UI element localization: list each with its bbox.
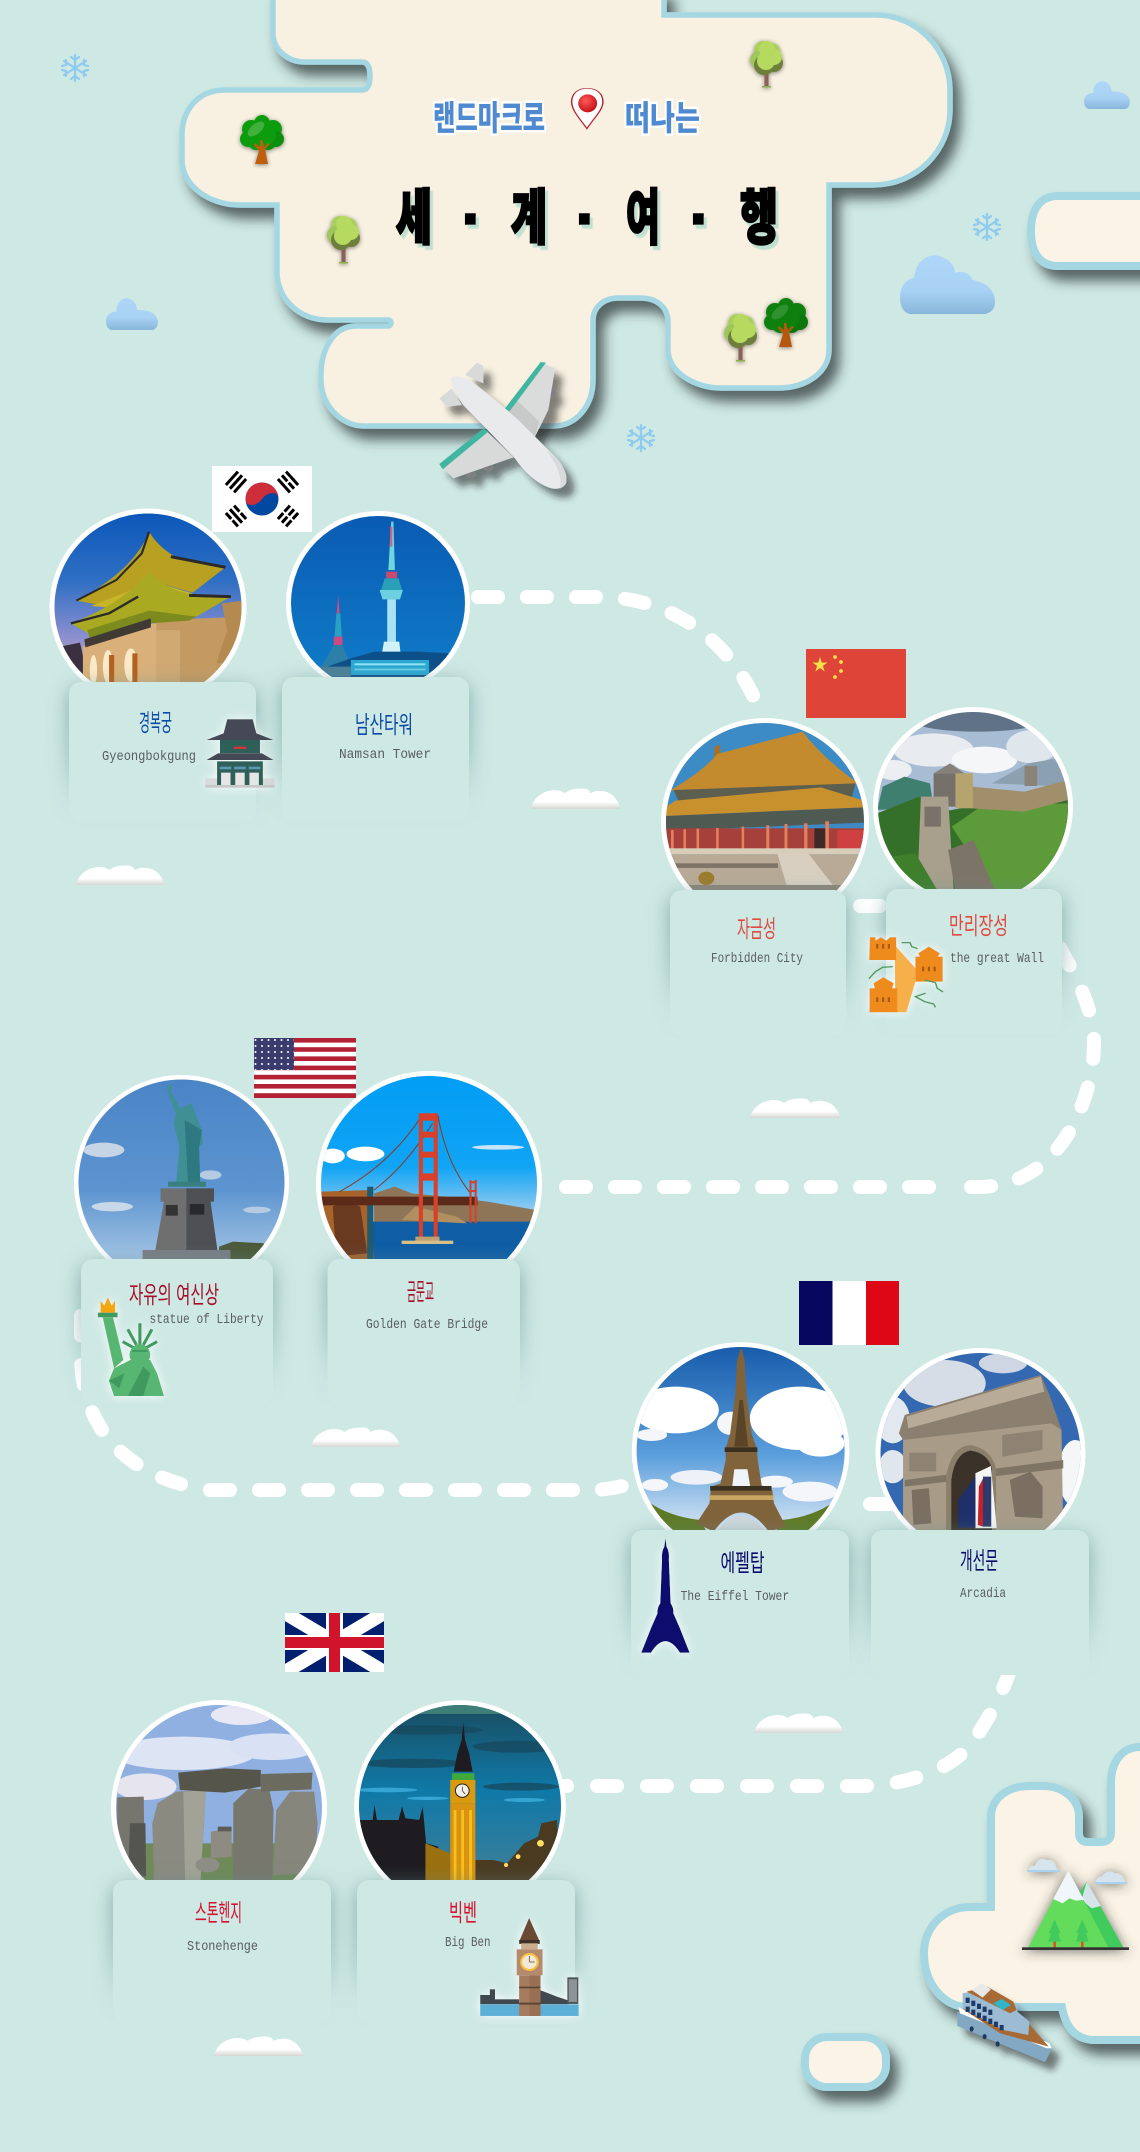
Korean name: 만리장성: 만리장성 — [949, 913, 1008, 940]
Korean name: 자금성: 자금성 — [737, 916, 776, 943]
cloud: white lower left — [311, 1427, 400, 1447]
card: Golden Gate Bridge — [328, 1259, 520, 1404]
tree: light bottom — [724, 314, 757, 362]
photo: Statue of Liberty — [73, 1077, 290, 1263]
route: dashed travel path — [81, 597, 1094, 1786]
subtitle: 랜드마크로: 랜드마크로 — [433, 100, 545, 138]
icon: Statue of Liberty — [98, 1297, 164, 1396]
English name: Namsan Tower: Namsan Tower — [339, 747, 431, 763]
photo: Eiffel Tower — [631, 1340, 851, 1532]
cloud: blue large — [900, 255, 995, 314]
flag: China — [806, 649, 906, 718]
icon: Great Wall — [869, 937, 943, 1012]
English name: statue of Liberty: statue of Liberty — [150, 1312, 264, 1328]
English name: the great Wall: the great Wall — [950, 951, 1044, 967]
tree: dark left — [240, 115, 284, 164]
panel: Gyeongbokgung: 경복궁 — [139, 710, 172, 737]
title: 세·계·여·행: 계 — [511, 185, 547, 252]
title: 세·계·여·행: 행 — [740, 185, 778, 252]
title: 세·계·여·행: · — [462, 185, 482, 252]
Korean name: 개선문: 개선문 — [960, 1548, 998, 1575]
icon: cruise ship — [957, 1983, 1052, 2062]
cloud: white lower right — [754, 1713, 843, 1733]
photo: Great Wall of China — [874, 707, 1074, 893]
island: top title island — [182, 0, 950, 426]
panel: Statue of Liberty — [73, 1075, 290, 1404]
cloud: white bottom — [214, 2036, 303, 2056]
island: small bottom islet — [805, 2037, 886, 2087]
panel: Golden Gate Bridge: 금문교 — [407, 1279, 434, 1306]
photo: Arc de Triomphe — [880, 1353, 1080, 1530]
panel: Forbidden City — [658, 718, 869, 1002]
card: Stonehenge — [113, 1880, 331, 2023]
English name: Golden Gate Bridge: Golden Gate Bridge — [366, 1317, 488, 1333]
flag: United Kingdom — [285, 1613, 384, 1672]
card: Eiffel Tower — [631, 1530, 849, 1675]
flag: France — [799, 1281, 899, 1345]
photo: Gyeongbokgung palace — [54, 514, 242, 682]
cloud: white under Korea — [76, 865, 164, 885]
icon: location pin — [572, 88, 603, 129]
panel: Gyeongbokgung — [47, 508, 275, 823]
icon: Big Ben tower — [480, 1918, 579, 2016]
island: bottom right island — [924, 1747, 1140, 2040]
Korean name: 남산타워: 남산타워 — [355, 712, 413, 739]
card: Namsan Tower — [282, 677, 469, 822]
tree: light center left — [327, 216, 360, 264]
snowflake: right — [974, 214, 1000, 240]
panel: Eiffel Tower — [631, 1340, 851, 1675]
flag: South Korea — [212, 466, 312, 532]
card: Arc de Triomphe — [871, 1530, 1089, 1675]
photo: Namsan Tower at night — [291, 516, 465, 677]
photo: Stonehenge — [111, 1700, 328, 1880]
cloud: blue top right — [1084, 81, 1130, 109]
panel: Great Wall — [869, 707, 1074, 1034]
cloud: white center upper — [531, 788, 620, 809]
photo: Golden Gate Bridge — [321, 1076, 537, 1259]
card: Great Wall — [886, 889, 1062, 1034]
panel: Namsan Tower — [282, 510, 473, 822]
Korean name: 에펠탑: 에펠탑 — [720, 1550, 764, 1577]
icon: Eiffel Tower — [641, 1538, 690, 1653]
panel: Golden Gate Bridge — [316, 1071, 542, 1372]
English name: Big Ben: Big Ben — [445, 1935, 490, 1951]
photo: Big Ben at dusk — [352, 1700, 567, 1882]
English name: Stonehenge: Stonehenge — [187, 1939, 258, 1955]
airplane — [439, 362, 566, 489]
title: 세·계·여·행: · — [576, 185, 596, 252]
panel: Stonehenge — [111, 1700, 331, 2023]
card: Statue of Liberty — [81, 1259, 273, 1404]
icon: mountain — [1022, 1859, 1129, 1950]
title: 세·계·여·행: 세 — [396, 185, 432, 252]
snowflake: center — [628, 425, 654, 451]
Korean name: 빅벤: 빅벤 — [449, 1900, 477, 1927]
English name: Arcadia: Arcadia — [960, 1586, 1006, 1602]
Korean name: 자유의 여신상: 자유의 여신상 — [129, 1282, 219, 1309]
title: 세·계·여·행: · — [690, 185, 710, 252]
flag: United States — [254, 1038, 356, 1098]
tree: dark bottom — [764, 298, 808, 347]
title: 세·계·여·행 — [396, 185, 778, 252]
card: Gyeongbokgung — [69, 682, 256, 822]
card: Forbidden City — [670, 890, 846, 1035]
photo: Forbidden City hall — [666, 723, 864, 890]
English name: Gyeongbokgung: Gyeongbokgung — [102, 749, 196, 765]
cloud: blue left — [106, 298, 158, 330]
cloud: white center — [750, 1098, 840, 1118]
English name: The Eiffel Tower: The Eiffel Tower — [681, 1589, 789, 1605]
panel: Big Ben — [352, 1700, 579, 2023]
panel: Arc de Triomphe — [871, 1347, 1092, 1675]
tree: light top right — [750, 41, 783, 88]
title: 세·계·여·행: 여 — [626, 185, 660, 252]
English name: Forbidden City: Forbidden City — [711, 951, 803, 967]
island: small right island — [1031, 196, 1140, 266]
Korean name: 스톤헨지: 스톤헨지 — [195, 1900, 242, 1927]
card: Big Ben — [357, 1880, 575, 2023]
icon: Korean palace — [205, 719, 275, 788]
subtitle: 떠나는: 떠나는 — [625, 100, 700, 138]
snowflake: top left — [62, 55, 88, 81]
